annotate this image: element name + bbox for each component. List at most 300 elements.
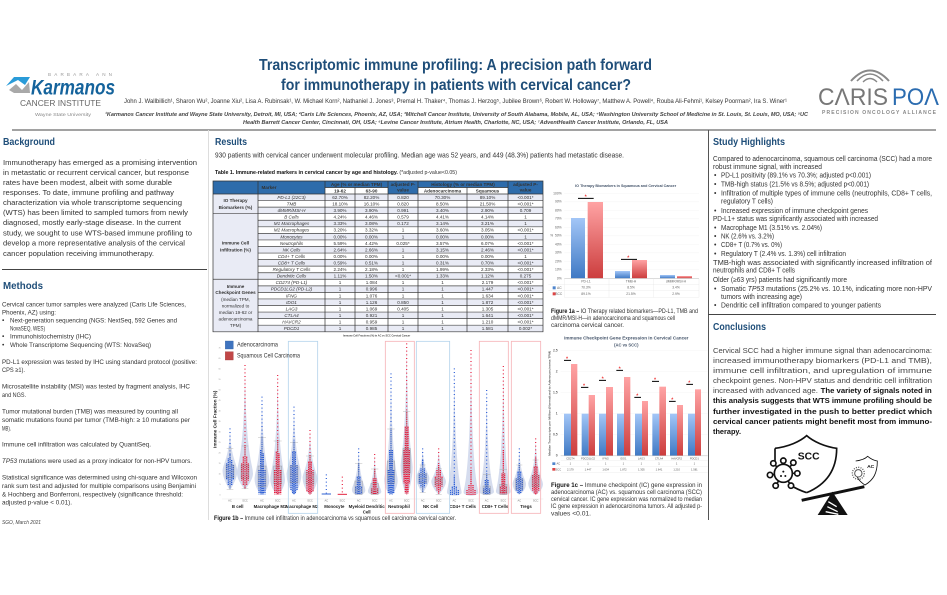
- table 1: 4.41%: [436, 215, 449, 220]
- data table: 1.581: [691, 467, 698, 471]
- figure 1c: immune checkpoint gene expression bar chart: Median Transcripts per Million (Normalized to Adenocarcinoma TPM): [548, 351, 552, 456]
- table 1: <0.001*: [518, 195, 534, 200]
- table 1: 1: [402, 313, 405, 318]
- table 1: 2.64%: [333, 247, 347, 252]
- table 1: normalized to: [222, 304, 250, 308]
- logo: Karmanos Cancer Institute: BARBARA ANN: [48, 72, 112, 77]
- data table: 1: [587, 462, 589, 466]
- table 1: 1: [339, 287, 342, 292]
- figure 1b: violin plot of immune cell fractions: 5: [220, 484, 222, 486]
- table 1: 0.00%: [436, 254, 449, 259]
- methods text: Immunohistochemistry (IHC): [10, 334, 91, 341]
- category labels: [228, 499, 539, 514]
- figure 1a: IO therapy biomarker bar chart: 70%: [555, 217, 562, 221]
- background text: characterization via whole transcriptome sequencing: [3, 198, 182, 207]
- table 1: 1.069: [366, 306, 378, 311]
- highlights text: •: [714, 303, 717, 310]
- violins: CD8+ T cells: [479, 366, 511, 495]
- data table: TMB-H: [626, 279, 637, 283]
- logo: Caris POA: CΛRIS: [818, 84, 888, 111]
- category labels: AC: [517, 499, 521, 503]
- table 1: 1.305: [482, 306, 494, 311]
- conclusions text: The variety of signals noted in: [821, 386, 932, 395]
- table 1: 1: [339, 280, 342, 285]
- logo: Karmanos Cancer Institute: Wayne State University: [35, 112, 92, 118]
- table 1: 2.33%: [481, 267, 494, 272]
- methods text: & Hochberg and Bonferroni, respectively (significance threshold:: [2, 491, 183, 498]
- data table: [552, 456, 708, 472]
- affiliations: ¹Karmanos Cancer Institute and Wayne State University, Detroit, MI, USA; ²Caris Life Sciences, Phoenix, AZ, USA; ³Mitchell Cancer Institute, University of South Alabama, Mobile, AL, USA; ⁴Washington University School of Medicine in St. Louis, St. Louis, MO, USA; ⁵UC: [105, 111, 809, 118]
- highlights text: Compared to adenocarcinoma, squamous cell carcinoma (SCC) had a more: [713, 156, 932, 163]
- table 1: CTLA4: [284, 313, 299, 318]
- violins: Tregs: [513, 438, 543, 495]
- table 1: 1: [441, 306, 444, 311]
- highlights text: TMB-high status (21.5% vs 8.5%; adjusted p<0.001): [721, 182, 869, 189]
- table 1: 4.24%: [333, 215, 347, 220]
- table 1: 21.50%: [480, 201, 495, 206]
- highlights text: •: [714, 225, 717, 232]
- table 1: value: [520, 188, 532, 192]
- figure 1a: IO therapy biomarker bar chart: 30%: [555, 251, 562, 255]
- table 1: 5.59%: [333, 241, 347, 246]
- data table: 8.5%: [627, 286, 635, 290]
- category labels: SCC: [404, 499, 410, 503]
- table 1: 1: [402, 320, 405, 324]
- data table: 1: [605, 462, 607, 466]
- figure 1b: violin plot of immune cell fractions: 25: [218, 442, 222, 444]
- data table: AC: [556, 462, 560, 466]
- table 1: 1.33%: [436, 274, 449, 279]
- figure 1b: violin plot of immune cell fractions: 45: [218, 400, 222, 402]
- figure 1a: IO therapy biomarker bar chart: 0%: [557, 276, 562, 280]
- highlights text: [713, 156, 932, 310]
- figure 1a: IO therapy biomarker bar chart: 50%: [555, 234, 562, 238]
- significance markers: *: [636, 394, 639, 400]
- table 1: 1.50%: [365, 274, 378, 279]
- table 1: adjusted P-: [513, 182, 538, 187]
- figure 1c caption: adenocarcinoma (AC) vs. squamous cell carcinoma (SCC): [551, 489, 702, 496]
- highlights text: tumors with increasing age): [721, 294, 802, 301]
- figure 1b: violin plot of immune cell fractions: 65: [218, 358, 222, 360]
- category labels: SCC: [275, 499, 281, 503]
- category labels: NK Cell: [423, 504, 438, 509]
- category labels: Cell: [363, 509, 371, 514]
- highlights text: Somatic TP53 mutations (25.2% vs. 10.1%, indicating more non-HPV: [721, 286, 932, 293]
- category labels: Macrophage M1: [254, 504, 287, 509]
- table 1: <0.001*: [518, 267, 534, 272]
- highlights text: •: [714, 208, 717, 215]
- conclusions text: this analysis suggests that WTS immune profiling should be: [713, 396, 932, 405]
- table 1: Biomarkers (%): [219, 205, 253, 210]
- figure 1a: IO therapy biomarker bar chart: 40%: [555, 242, 562, 246]
- background text: develop a more representative analysis of the cervical: [3, 238, 185, 248]
- category labels: AC: [389, 499, 393, 503]
- category labels: AC: [228, 499, 232, 503]
- logo: Karmanos Cancer Institute: Karmanos: [31, 76, 115, 100]
- table 1: 1: [339, 313, 342, 318]
- table 1: 1: [339, 306, 342, 311]
- significance markers: *: [585, 195, 588, 201]
- table 1: 62.70%: [332, 195, 348, 200]
- category labels: AC: [357, 499, 361, 503]
- figure 1b: violin plot of immune cell fractions: 15: [218, 463, 222, 465]
- table 1: Regulatory T Cells: [273, 267, 311, 272]
- figure 1b: violin plot of immune cell fractions: 55: [218, 379, 222, 381]
- table 1: <0.001*: [518, 306, 534, 311]
- table 1: <0.001*: [518, 287, 534, 292]
- data table: 1: [694, 462, 696, 466]
- methods text: •: [2, 317, 5, 324]
- category labels: Macrophage M2: [286, 504, 319, 509]
- figure 1c: immune checkpoint gene expression bar chart: 2: [556, 370, 558, 374]
- figure 1c: immune checkpoint gene expression bar chart: 0.5: [553, 433, 558, 437]
- highlights text: Regulatory T (2.4% vs. 1.3%) cell infiltration: [721, 251, 846, 258]
- table 1: 2.179: [482, 280, 494, 285]
- violins: macrophage M2: [287, 407, 317, 495]
- data table: 1.634: [602, 467, 610, 471]
- conclusions text: increased immunotherapy biomarkers (PD-L1 and TMB),: [713, 356, 932, 365]
- panel: background: [3, 136, 197, 258]
- table 1: 1.447: [482, 287, 494, 292]
- table 1: 0.959: [366, 320, 378, 324]
- figure 1a caption: dMMR/MSI-H—in adenocarcinoma and squamous cell: [551, 315, 675, 322]
- significance markers: *: [583, 384, 586, 390]
- category labels: AC: [324, 499, 328, 503]
- table 1: 4.46%: [365, 215, 378, 220]
- significance markers: *: [654, 378, 657, 384]
- authors: John J. Wallbillich¹, Sharon Wu², Joanne Xiu², Lisa A. Rubinsak¹, W. Michael Korn², Nathaniel J. Jones³, Premal H. Thaker⁴, Thomas J. Herzog⁵, Jubilee Brown⁶, Robert W. Holloway⁷, Matthew A. Powell⁴, Rouba Ali-Fehmi¹, Kelsey Poorman², Ira S. Winer¹: [124, 98, 787, 105]
- table 1: 1: [441, 326, 444, 331]
- table 1: 1.11%: [334, 274, 346, 279]
- highlights text: •: [714, 242, 717, 249]
- table 1: <0.001*: [395, 274, 411, 279]
- title: [259, 57, 652, 94]
- highlights text: robust immune signal, with increased: [713, 164, 822, 171]
- table 1: [213, 181, 543, 332]
- table 1: 1.12%: [481, 274, 494, 279]
- figure 1b: violin plot of immune cell fractions: 0: [220, 495, 222, 497]
- table 1: 1: [441, 293, 444, 298]
- highlight boxes: [288, 341, 541, 513]
- data table: 89.1%: [581, 292, 591, 296]
- table 1: 1: [402, 293, 405, 298]
- figure 1a caption: [551, 308, 698, 329]
- table 1: 2.90%: [481, 208, 494, 213]
- figure 1b: violin plot of immune cell fractions: [213, 335, 543, 514]
- table 1: CD8+ T Cells: [278, 260, 306, 266]
- category labels: Neutrophil: [388, 504, 410, 509]
- background text: (WTS) has been limited to sampled tumors from newly: [3, 208, 188, 217]
- category labels: SCC: [533, 499, 539, 503]
- table 1: 1: [402, 280, 405, 285]
- figure 1a: IO therapy biomarker bar chart: IO Therapy Biomarkers in Squamous and Cervical Cancer: [575, 183, 677, 188]
- violins: B cell: [223, 365, 253, 490]
- table 1: <0.001*: [518, 228, 534, 233]
- highlights text: Infiltration of multiple types of immune cells (neutrophils, CD8+ T cells,: [721, 191, 932, 198]
- table 1: 82.20%: [364, 195, 379, 200]
- table 1: IO Therapy: [224, 198, 248, 203]
- data table: 1.305: [638, 467, 645, 471]
- table 1: 1.210: [482, 320, 494, 324]
- table 1: 19-62: [334, 188, 346, 193]
- table 1: PDCD1: [284, 326, 300, 331]
- methods text: TP53 mutations were used as a proxy indicator for non-HPV tumors.: [2, 458, 192, 465]
- table 1: 1: [402, 234, 405, 239]
- table 1: <0.001*: [518, 280, 534, 285]
- table 1: 0.00%: [481, 234, 494, 239]
- figure 1a: IO therapy biomarker bar chart: %: [550, 234, 553, 238]
- title: Transcriptomic immune profiling: A precision path forward: [259, 57, 652, 74]
- category labels: SCC: [468, 499, 474, 503]
- violins: macrophage M1: [255, 375, 285, 495]
- title: for immunotherapy in patients with cervical cancer?: [281, 77, 631, 94]
- legend: Adenocarcinoma: [237, 343, 279, 349]
- significance markers: [578, 195, 637, 262]
- table 1: CD4+ T Cells: [278, 254, 306, 259]
- table 1: 1.581: [482, 326, 494, 331]
- figure 1a: IO therapy biomarker bar chart: 20%: [555, 259, 562, 263]
- figure 1c: immune checkpoint gene expression bar chart: [548, 336, 708, 472]
- table 1: 1: [441, 313, 444, 318]
- category labels: SCC: [372, 499, 378, 503]
- table 1: 2.46%: [481, 247, 494, 252]
- background text: rates have been modest, albeit with some durable: [3, 178, 172, 187]
- table 1: 1: [402, 326, 405, 331]
- heading: background: Background: [3, 136, 55, 148]
- footnote: meeting: SGO, March 2021: [2, 520, 41, 526]
- table 1: 1: [402, 228, 405, 233]
- table 1: M1 Macrophages: [274, 221, 310, 226]
- methods text: Cervical cancer tumor samples were analyzed (Caris Life Sciences,: [2, 301, 186, 308]
- figure 1a: IO therapy biomarker bar chart: 60%: [555, 225, 562, 229]
- data table: 1: [658, 462, 660, 466]
- category labels: SCC: [242, 499, 248, 503]
- legend: [225, 341, 301, 360]
- figure 1b: violin plot of immune cell fractions: 10: [218, 474, 222, 476]
- table 1: IFNG: [286, 293, 297, 298]
- table 1: 1: [524, 215, 527, 220]
- table 1: 2.18%: [365, 267, 378, 272]
- table 1: 3.21%: [481, 221, 494, 226]
- table 1: 0.00%: [365, 254, 378, 259]
- data table: SCC: [556, 467, 561, 471]
- table 1: 1: [524, 254, 527, 259]
- icon: balance of SCC and AC shields: SCC: [798, 452, 820, 463]
- table 1: 1: [402, 287, 405, 292]
- data table: LAG3: [638, 456, 645, 460]
- figure 1a: IO therapy biomarker bar chart: 80%: [555, 208, 562, 212]
- figure 1c: immune checkpoint gene expression bar chart: 0: [556, 454, 558, 458]
- significance markers: *: [566, 357, 569, 363]
- heading: study highlights: Study Highlights: [713, 136, 785, 148]
- table 1: 1: [441, 300, 444, 305]
- table 1: 1: [441, 320, 444, 324]
- methods text: [2, 301, 197, 507]
- background text: [3, 158, 197, 258]
- table 1: 16.10%: [364, 201, 379, 206]
- bars: adenocarcinoma: [571, 218, 675, 278]
- significance markers: *: [671, 398, 674, 404]
- table 1: 1.872: [482, 300, 494, 305]
- highlights text: Macrophage M1 (3.51% vs. 2.04%): [721, 225, 822, 232]
- category labels: SCC: [307, 499, 313, 503]
- highlights text: regulatory T cells): [721, 199, 773, 206]
- table 1: 0.025*: [396, 241, 410, 246]
- table 1: 89.10%: [480, 195, 495, 200]
- table 1: 0.172: [397, 221, 409, 226]
- table 1: Immune: [227, 284, 245, 289]
- table 1: 3.33%: [333, 221, 347, 226]
- table 1: 3.32%: [365, 228, 378, 233]
- data table: PDCD1: [690, 456, 699, 460]
- significance markers: *: [602, 377, 605, 383]
- highlights text: •: [714, 233, 717, 240]
- heading: results: Results: [215, 136, 247, 148]
- figure 1c: immune checkpoint gene expression bar chart: 1.5: [553, 391, 558, 395]
- figure 1a: IO therapy biomarker bar chart: 100%: [553, 191, 562, 195]
- background text: Immunotherapy has emerged as a promising intervention: [3, 158, 197, 167]
- figure 1a caption: carcinoma cervical cancer.: [551, 322, 624, 329]
- methods text: MB).: [2, 425, 11, 432]
- methods text: somatic mutations found per tumor (TMB-high: ≥ 10 mutations per: [2, 417, 191, 424]
- data table: dMMR/MSI-H: [666, 279, 687, 283]
- data table: 1: [570, 462, 572, 466]
- figure 1c caption: IC gene expression in adenocarcinoma tumors. All adjusted p-: [551, 503, 702, 510]
- data table: IFNG: [602, 456, 609, 460]
- table 1: <0.001*: [518, 201, 534, 206]
- background text: study, we sought to use WTS-based immune profiling to: [3, 228, 192, 238]
- table 1: 0.002*: [519, 326, 532, 331]
- background text: responses. To date, immune profiling and pathway: [3, 188, 174, 197]
- table 1: 4.14%: [481, 215, 494, 220]
- table 1: 0.59%: [333, 260, 347, 266]
- highlights text: neutrophils and CD8+ T cells: [713, 268, 796, 275]
- table 1: <0.001*: [518, 241, 534, 246]
- table 1: 1: [524, 221, 527, 226]
- category labels: Monocyte: [324, 504, 345, 509]
- table 1: 1: [441, 287, 444, 292]
- significance markers: *: [688, 381, 691, 387]
- logo: Caris POA: [818, 70, 939, 116]
- table 1: Age (% or median TPM): [331, 182, 383, 187]
- icon: balance of SCC and AC shields: AC: [867, 464, 875, 470]
- figure 1c: immune checkpoint gene expression bar chart: 1: [556, 412, 558, 416]
- data table: AC: [557, 286, 562, 290]
- table 1: 0.850: [397, 300, 409, 305]
- table 1: LAG3: [286, 306, 298, 311]
- figure 1c caption: values <0.01.: [551, 510, 591, 518]
- table 1: 1.634: [482, 293, 494, 298]
- category labels: Myeloid Dendritic: [349, 504, 385, 509]
- table 1: 8.50%: [436, 201, 449, 206]
- table 1: CD274 (PD-L1): [276, 280, 308, 285]
- background text: cancer population receiving immunotherapy.: [3, 249, 154, 258]
- data table: 1: [676, 462, 678, 466]
- data table: 1.447: [585, 467, 592, 471]
- conclusions text: immune cell infiltration, and upregulation of immune: [713, 366, 932, 375]
- data table: SCC: [555, 292, 563, 296]
- table 1: 63-90: [366, 188, 378, 193]
- table 1: 3.20%: [333, 228, 347, 233]
- table 1: 70.30%: [435, 195, 450, 200]
- figure 1c: immune checkpoint gene expression bar chart: Immune Checkpoint Gene Expression in Cervical Cancer: [564, 336, 689, 341]
- conclusions text: increased with advanced age.: [713, 386, 818, 395]
- figure 1c caption: [551, 482, 703, 518]
- highlights text: •: [714, 191, 717, 198]
- data table: 70.3%: [581, 286, 591, 290]
- table 1: 0.00%: [333, 234, 347, 239]
- category labels: SCC: [501, 499, 506, 503]
- table 1: <0.001*: [518, 320, 534, 324]
- category labels: CD8+ T Cells: [482, 504, 509, 509]
- data table: 2.9%: [672, 292, 680, 296]
- methods text: and NGS.: [2, 392, 26, 399]
- figure 1b: violin plot of immune cell fractions: 35: [218, 421, 222, 423]
- data table: 1.872: [620, 467, 627, 471]
- data table: 1.641: [656, 467, 663, 471]
- table 1: PDCD1LG2 (PD-L2): [271, 287, 313, 292]
- table 1: Infiltration (%): [220, 248, 251, 252]
- data table: 1.210: [673, 467, 681, 471]
- table 1: 0.00%: [365, 234, 378, 239]
- table 1: <0.001*: [518, 300, 534, 305]
- table 1: 1.99%: [436, 267, 449, 272]
- table 1: Monocytes: [280, 234, 303, 239]
- highlights text: PD-L1+ status was significantly associated with increased: [713, 216, 878, 223]
- y-axis title: Immune Cell Fraction (%): [213, 390, 219, 448]
- table 1: 2.24%: [333, 267, 347, 272]
- category labels: Tregs: [520, 504, 532, 509]
- conclusions text: further investigated in the push to better predict which: [713, 407, 932, 416]
- highlights text: •: [714, 182, 717, 189]
- figure 1a: IO therapy biomarker bar chart: 10%: [555, 268, 562, 272]
- data table: [548, 279, 699, 297]
- panel: conclusions: [713, 321, 933, 515]
- table 1: Histology (% or median TPM): [431, 182, 495, 187]
- category labels: AC: [260, 499, 264, 503]
- table 1: 3.60%: [436, 228, 449, 233]
- conclusions text: checkpoint genes. Non-HPV status and dendritic cell infiltration: [713, 376, 932, 385]
- table 1: 3.08%: [365, 221, 378, 226]
- significance markers: [564, 357, 693, 404]
- methods text: NovaSEQ, WES): [10, 326, 45, 333]
- panel: methods: [2, 280, 197, 507]
- table 1: adenocarcinoma: [219, 316, 253, 322]
- table 1: 0.00%: [481, 254, 494, 259]
- table 1: 0.00%: [333, 254, 347, 259]
- category labels: AC: [421, 499, 425, 503]
- methods text: Statistical significance was determined using chi-square and Wilcoxon: [2, 475, 197, 482]
- violins: myeloid dendritic cell: [352, 448, 381, 495]
- figure 1c caption: Figure 1c – Immune checkpoint (IC) gene expression in: [551, 482, 703, 489]
- table 1: 0.921: [366, 313, 378, 318]
- table 1: adjusted P-: [391, 182, 416, 187]
- conclusions text: cervical cancer patients might benefit most from immuno-: [713, 417, 933, 426]
- table 1: 6.07%: [481, 241, 494, 246]
- figure 1b: violin plot of immune cell fractions: 60: [218, 369, 222, 371]
- table 1: 1: [339, 293, 342, 298]
- table 1: Dendritic Cells: [277, 274, 307, 279]
- table 1: median 19-62 or: [219, 310, 253, 315]
- table 1: 3.57%: [436, 241, 449, 246]
- methods text: Whole Transcriptome Sequencing (WTS: NovaSeq): [10, 342, 151, 349]
- table 1: 0.405: [397, 306, 409, 311]
- table 1: NK Cells: [283, 247, 301, 252]
- figure 1b: violin plot of immune cell fractions: 70: [218, 348, 222, 350]
- table 1: 1: [402, 260, 405, 266]
- highlights text: Dendritic cell infiltration compared to younger patients: [721, 303, 882, 310]
- data table: PD-L1: [581, 279, 591, 283]
